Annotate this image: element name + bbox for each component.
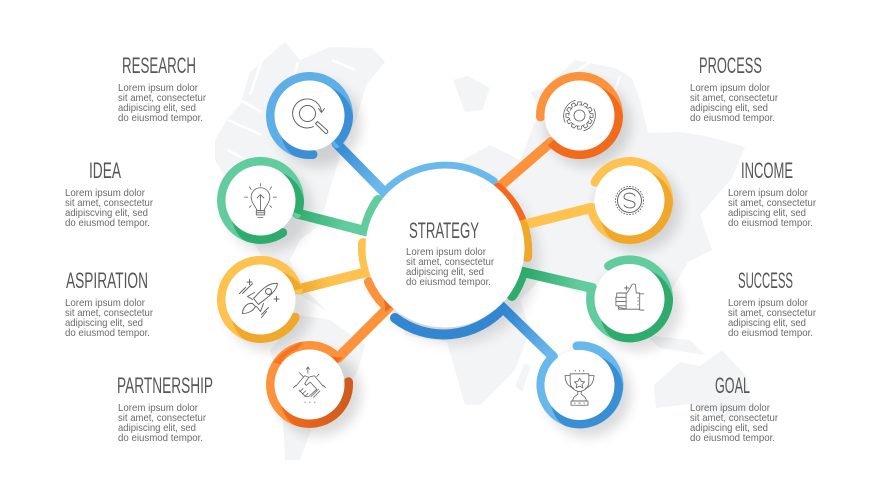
label: partnership: PARTNERSHIP [117, 373, 213, 398]
label: idea: sit amet, consectetur [65, 197, 153, 209]
label: process: adipiscing elit, sed [690, 102, 768, 114]
label: goal: sit amet, consectetur [690, 412, 778, 424]
label: partnership [117, 373, 213, 444]
label: income: sit amet, consectetur [728, 197, 816, 209]
label: income: adipiscing elit, sed [728, 207, 806, 219]
label: aspiration: adipiscing elit, sed [65, 317, 143, 329]
label: process: do eiusmod tempor. [690, 112, 775, 124]
label: partnership: adipiscing elit, sed [118, 422, 196, 434]
label: process: Lorem ipsum dolor [690, 82, 770, 94]
label: income: do eiusmod tempor. [728, 217, 813, 229]
label: research: Lorem ipsum dolor [118, 82, 198, 94]
label: success: do eiusmod tempor. [728, 327, 813, 339]
label: idea: Lorem ipsum dolor [65, 187, 145, 199]
icon: thumbs up [616, 284, 644, 310]
label: goal: do eiusmod tempor. [690, 432, 775, 444]
label: aspiration: ASPIRATION [66, 268, 148, 293]
heading: strategy: STRATEGY [409, 218, 479, 243]
text block: strategy body: adipiscing elit, sed [406, 266, 484, 278]
text block: strategy body: Lorem ipsum dolor [406, 246, 486, 258]
label: research: do eiusmod tempor. [118, 112, 203, 124]
step: research ring and connector [271, 77, 493, 193]
label: partnership: sit amet, consectetur [118, 412, 206, 424]
icon: rocket [240, 280, 279, 318]
label: idea: adipiscving elit, sed [65, 207, 148, 219]
step: partnership ring and connector [270, 282, 392, 436]
label: goal: adipiscing elit, sed [690, 422, 768, 434]
label: research: sit amet, consectetur [118, 92, 206, 104]
label: idea: do eiusmod tempor. [65, 217, 150, 229]
label: partnership: do eiusmod tempor. [118, 432, 203, 444]
label: research: adipiscing elit, sed [118, 102, 196, 114]
icon: light bulb [244, 184, 277, 218]
text block: strategy body: sit amet, consectetur [406, 256, 494, 268]
icon: handshake [294, 367, 326, 402]
label: aspiration [65, 268, 153, 339]
icon: gear [564, 100, 595, 131]
label: partnership: Lorem ipsum dolor [118, 402, 198, 414]
label: income: Lorem ipsum dolor [728, 187, 808, 199]
step: goal ring and connector [395, 308, 631, 437]
label: process: sit amet, consectetur [690, 92, 778, 104]
step: success ring and connector [512, 260, 681, 351]
label: research [118, 53, 206, 124]
label: success: Lorem ipsum dolor [728, 297, 808, 309]
label: success [728, 268, 816, 339]
icon: trophy [565, 370, 594, 405]
world map background [215, 42, 752, 460]
step: aspiration ring and connector [222, 243, 367, 351]
label: goal: Lorem ipsum dolor [690, 402, 770, 414]
central circle: strategy [366, 168, 524, 328]
label: success: SUCCESS [738, 268, 793, 293]
step: idea ring and connector [222, 161, 378, 252]
label: goal: GOAL [715, 373, 750, 398]
label: idea [65, 158, 153, 229]
text block: strategy body: do eiusmod tempor. [406, 276, 491, 288]
label: income: INCOME [741, 158, 793, 183]
label: aspiration: do eiusmod tempor. [65, 327, 150, 339]
label: success: adipiscing elit, sed [728, 317, 806, 329]
label: aspiration: sit amet, consectetur [65, 307, 153, 319]
text block: strategy body [406, 246, 494, 288]
step: process ring and connector [498, 76, 631, 219]
icon: dollar coin [616, 186, 644, 214]
label: aspiration: Lorem ipsum dolor [65, 297, 145, 309]
central circle shadow [370, 175, 538, 343]
label: idea: IDEA [89, 158, 121, 183]
label: income [728, 158, 816, 229]
label: success: sit amet, consectetur [728, 307, 816, 319]
label: research: RESEARCH [122, 53, 196, 78]
label: goal [690, 373, 778, 444]
step: income ring and connector [523, 162, 681, 257]
icon: magnifier [293, 99, 328, 134]
label: process [690, 53, 778, 124]
label: process: PROCESS [699, 53, 762, 78]
